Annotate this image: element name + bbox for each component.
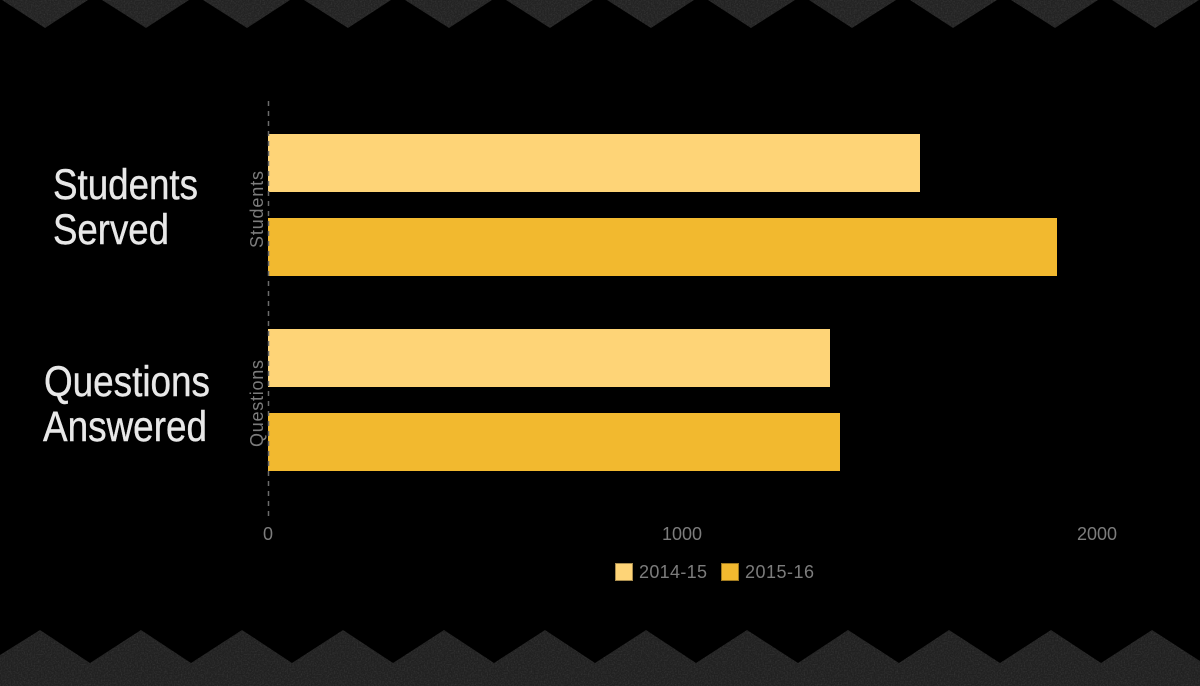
x axis tick: 0: 0 <box>263 524 273 544</box>
bottom zigzag border <box>0 630 1200 686</box>
heading: Students Served <box>53 161 198 254</box>
heading: Questions Answered: Questions <box>44 358 210 406</box>
x axis tick: 2000: 2000 <box>1077 524 1117 544</box>
y axis line <box>268 101 270 517</box>
top zigzag border <box>0 0 1200 28</box>
bar: Students 2015-16 <box>268 218 1057 276</box>
legend swatch: 2014-15 <box>616 564 632 580</box>
legend label: 2014-15: 2014-15 <box>639 562 707 582</box>
legend <box>616 562 814 582</box>
legend swatch: 2015-16 <box>722 564 738 580</box>
heading: Questions Answered <box>43 358 210 451</box>
bar chart <box>247 101 1117 544</box>
bar: Students 2014-15 <box>268 134 920 192</box>
heading: Questions Answered: Answered <box>43 403 207 451</box>
y axis label: Students: Students <box>247 171 267 248</box>
x axis tick: 1000: 1000 <box>662 524 702 544</box>
legend label: 2015-16: 2015-16 <box>745 562 814 582</box>
heading: Students Served: Served <box>53 206 169 254</box>
bar: Questions 2015-16 <box>268 413 840 471</box>
y axis label: Questions: Questions <box>247 360 267 447</box>
bar: Questions 2014-15 <box>268 329 830 387</box>
heading: Students Served: Students <box>53 161 198 209</box>
